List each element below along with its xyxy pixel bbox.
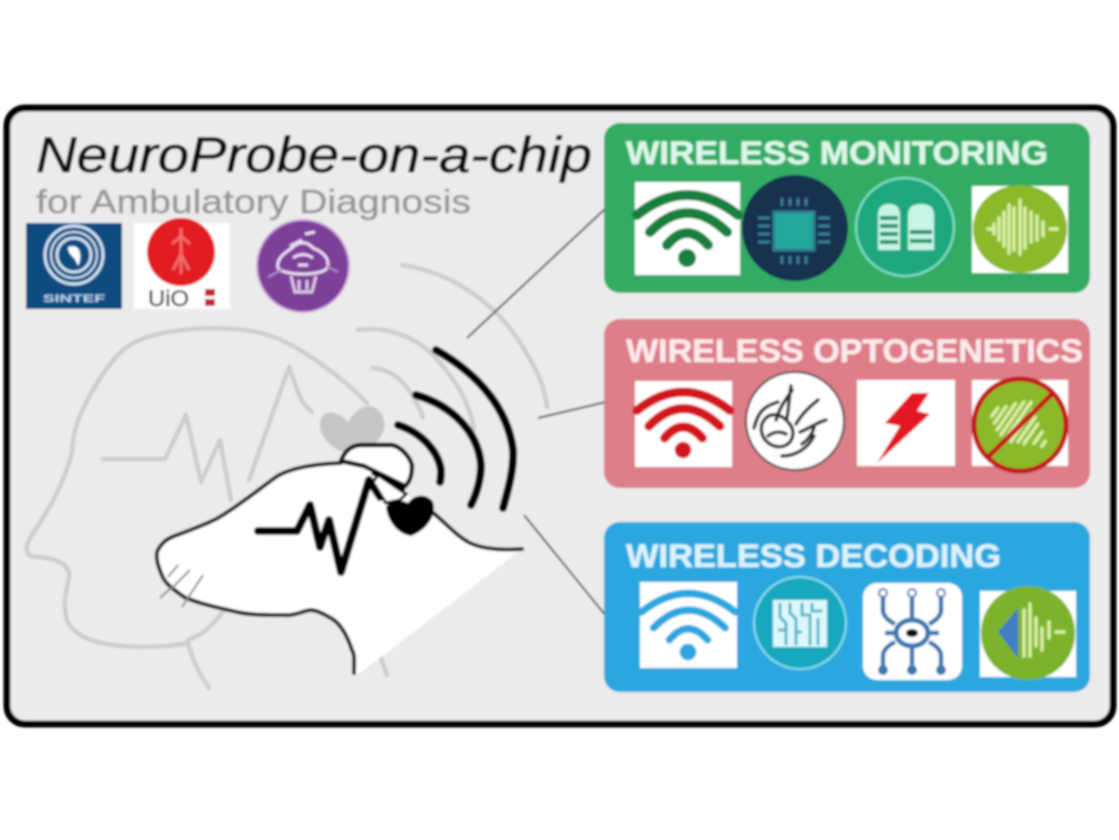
icon: wifi red bbox=[635, 381, 732, 467]
panel: wireless monitoring bbox=[604, 123, 1090, 293]
logo: SINTEF bbox=[26, 223, 122, 309]
human head outline (grey) bbox=[27, 265, 547, 688]
logo: UiO bbox=[134, 218, 230, 311]
icon: circuit bbox=[754, 577, 846, 669]
icon: wifi blue bbox=[640, 582, 737, 668]
logo: UiO: UiO bbox=[148, 286, 189, 311]
panel: wireless optogenetics bbox=[604, 319, 1090, 488]
logo: purple cloud badge bbox=[257, 220, 349, 312]
rat head bbox=[157, 445, 522, 673]
icon: wifi green bbox=[635, 182, 740, 275]
black signal waves bbox=[398, 350, 513, 508]
black heart bbox=[386, 496, 434, 536]
rat whiskers bbox=[160, 565, 203, 607]
subtitle: for Ambulatory Diagnosis bbox=[36, 183, 471, 220]
heading: WIRELESS MONITORING bbox=[626, 135, 1048, 171]
rat signal trace bbox=[258, 480, 380, 572]
icon: chip bbox=[742, 175, 848, 281]
rat implant cap bbox=[341, 445, 412, 486]
icon: batteries bbox=[856, 178, 954, 276]
icon: neuron probe bbox=[746, 372, 844, 470]
panel: main frame bbox=[7, 108, 1113, 724]
icon: lightning bolt bbox=[857, 380, 955, 466]
heading: WIRELESS DECODING bbox=[626, 538, 1001, 574]
heading: WIRELESS OPTOGENETICS bbox=[626, 333, 1083, 369]
icon: waveform bbox=[972, 185, 1068, 273]
grey heart (implant on human) bbox=[320, 406, 385, 455]
connector lines bbox=[467, 208, 606, 616]
strap bbox=[372, 472, 405, 490]
logo: SINTEF: SINTEF bbox=[43, 293, 105, 305]
icon: no waveform bbox=[972, 379, 1068, 471]
icon: neural network eye bbox=[863, 583, 962, 680]
panel: wireless decoding bbox=[604, 522, 1090, 692]
icon: speaker waveform bbox=[980, 586, 1076, 680]
title: NeuroProbe-on-a-chip bbox=[36, 127, 592, 183]
